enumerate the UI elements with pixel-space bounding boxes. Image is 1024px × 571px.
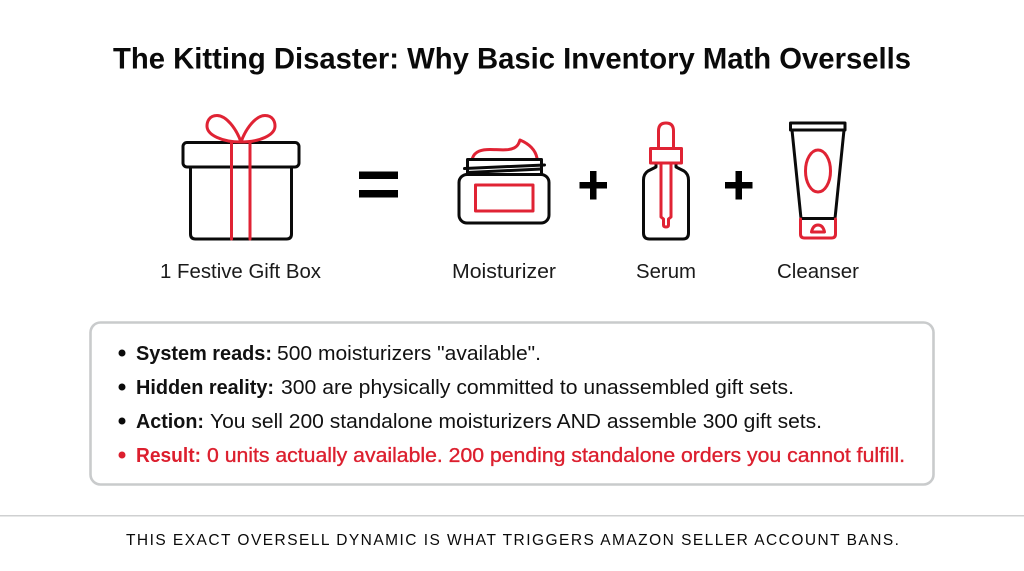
label: cleanser: Cleanser bbox=[777, 260, 859, 283]
plus sign bbox=[580, 171, 607, 200]
equals sign bbox=[359, 172, 398, 198]
label: gift box: 1 Festive Gift Box bbox=[160, 260, 322, 283]
bullet: result: 0 units actually available. 200 pending standalone orders you cannot fulfill. bbox=[207, 444, 905, 467]
bullet: hidden reality: Hidden reality: bbox=[136, 376, 274, 399]
icon: serum dropper bottle bbox=[644, 123, 688, 239]
label: moisturizer: Moisturizer bbox=[452, 260, 556, 283]
icon: cleanser tube bbox=[790, 123, 845, 238]
label: serum: Serum bbox=[636, 260, 696, 283]
plus sign bbox=[725, 171, 752, 200]
bullet: system reads: System reads: bbox=[136, 342, 272, 365]
bullet: result: Result: bbox=[136, 444, 201, 467]
bullet: system reads: 500 moisturizers "available". bbox=[277, 342, 541, 365]
title: The Kitting Disaster: Why Basic Inventory Math Oversells bbox=[113, 42, 911, 76]
bullet: hidden reality: 300 are physically committed to unassembled gift sets. bbox=[281, 376, 794, 399]
footer note: THIS EXACT OVERSELL DYNAMIC IS WHAT TRIGGERS AMAZON SELLER ACCOUNT BANS. bbox=[126, 532, 899, 549]
bullet: action: Action: bbox=[136, 410, 204, 433]
icon: moisturizer jar bbox=[459, 140, 549, 223]
panel: inventory explanation bbox=[90, 322, 934, 484]
bullet: system reads bbox=[118, 342, 541, 365]
bullet: action: You sell 200 standalone moisturizers AND assemble 300 gift sets. bbox=[210, 410, 822, 433]
icon: gift box bbox=[183, 116, 299, 239]
